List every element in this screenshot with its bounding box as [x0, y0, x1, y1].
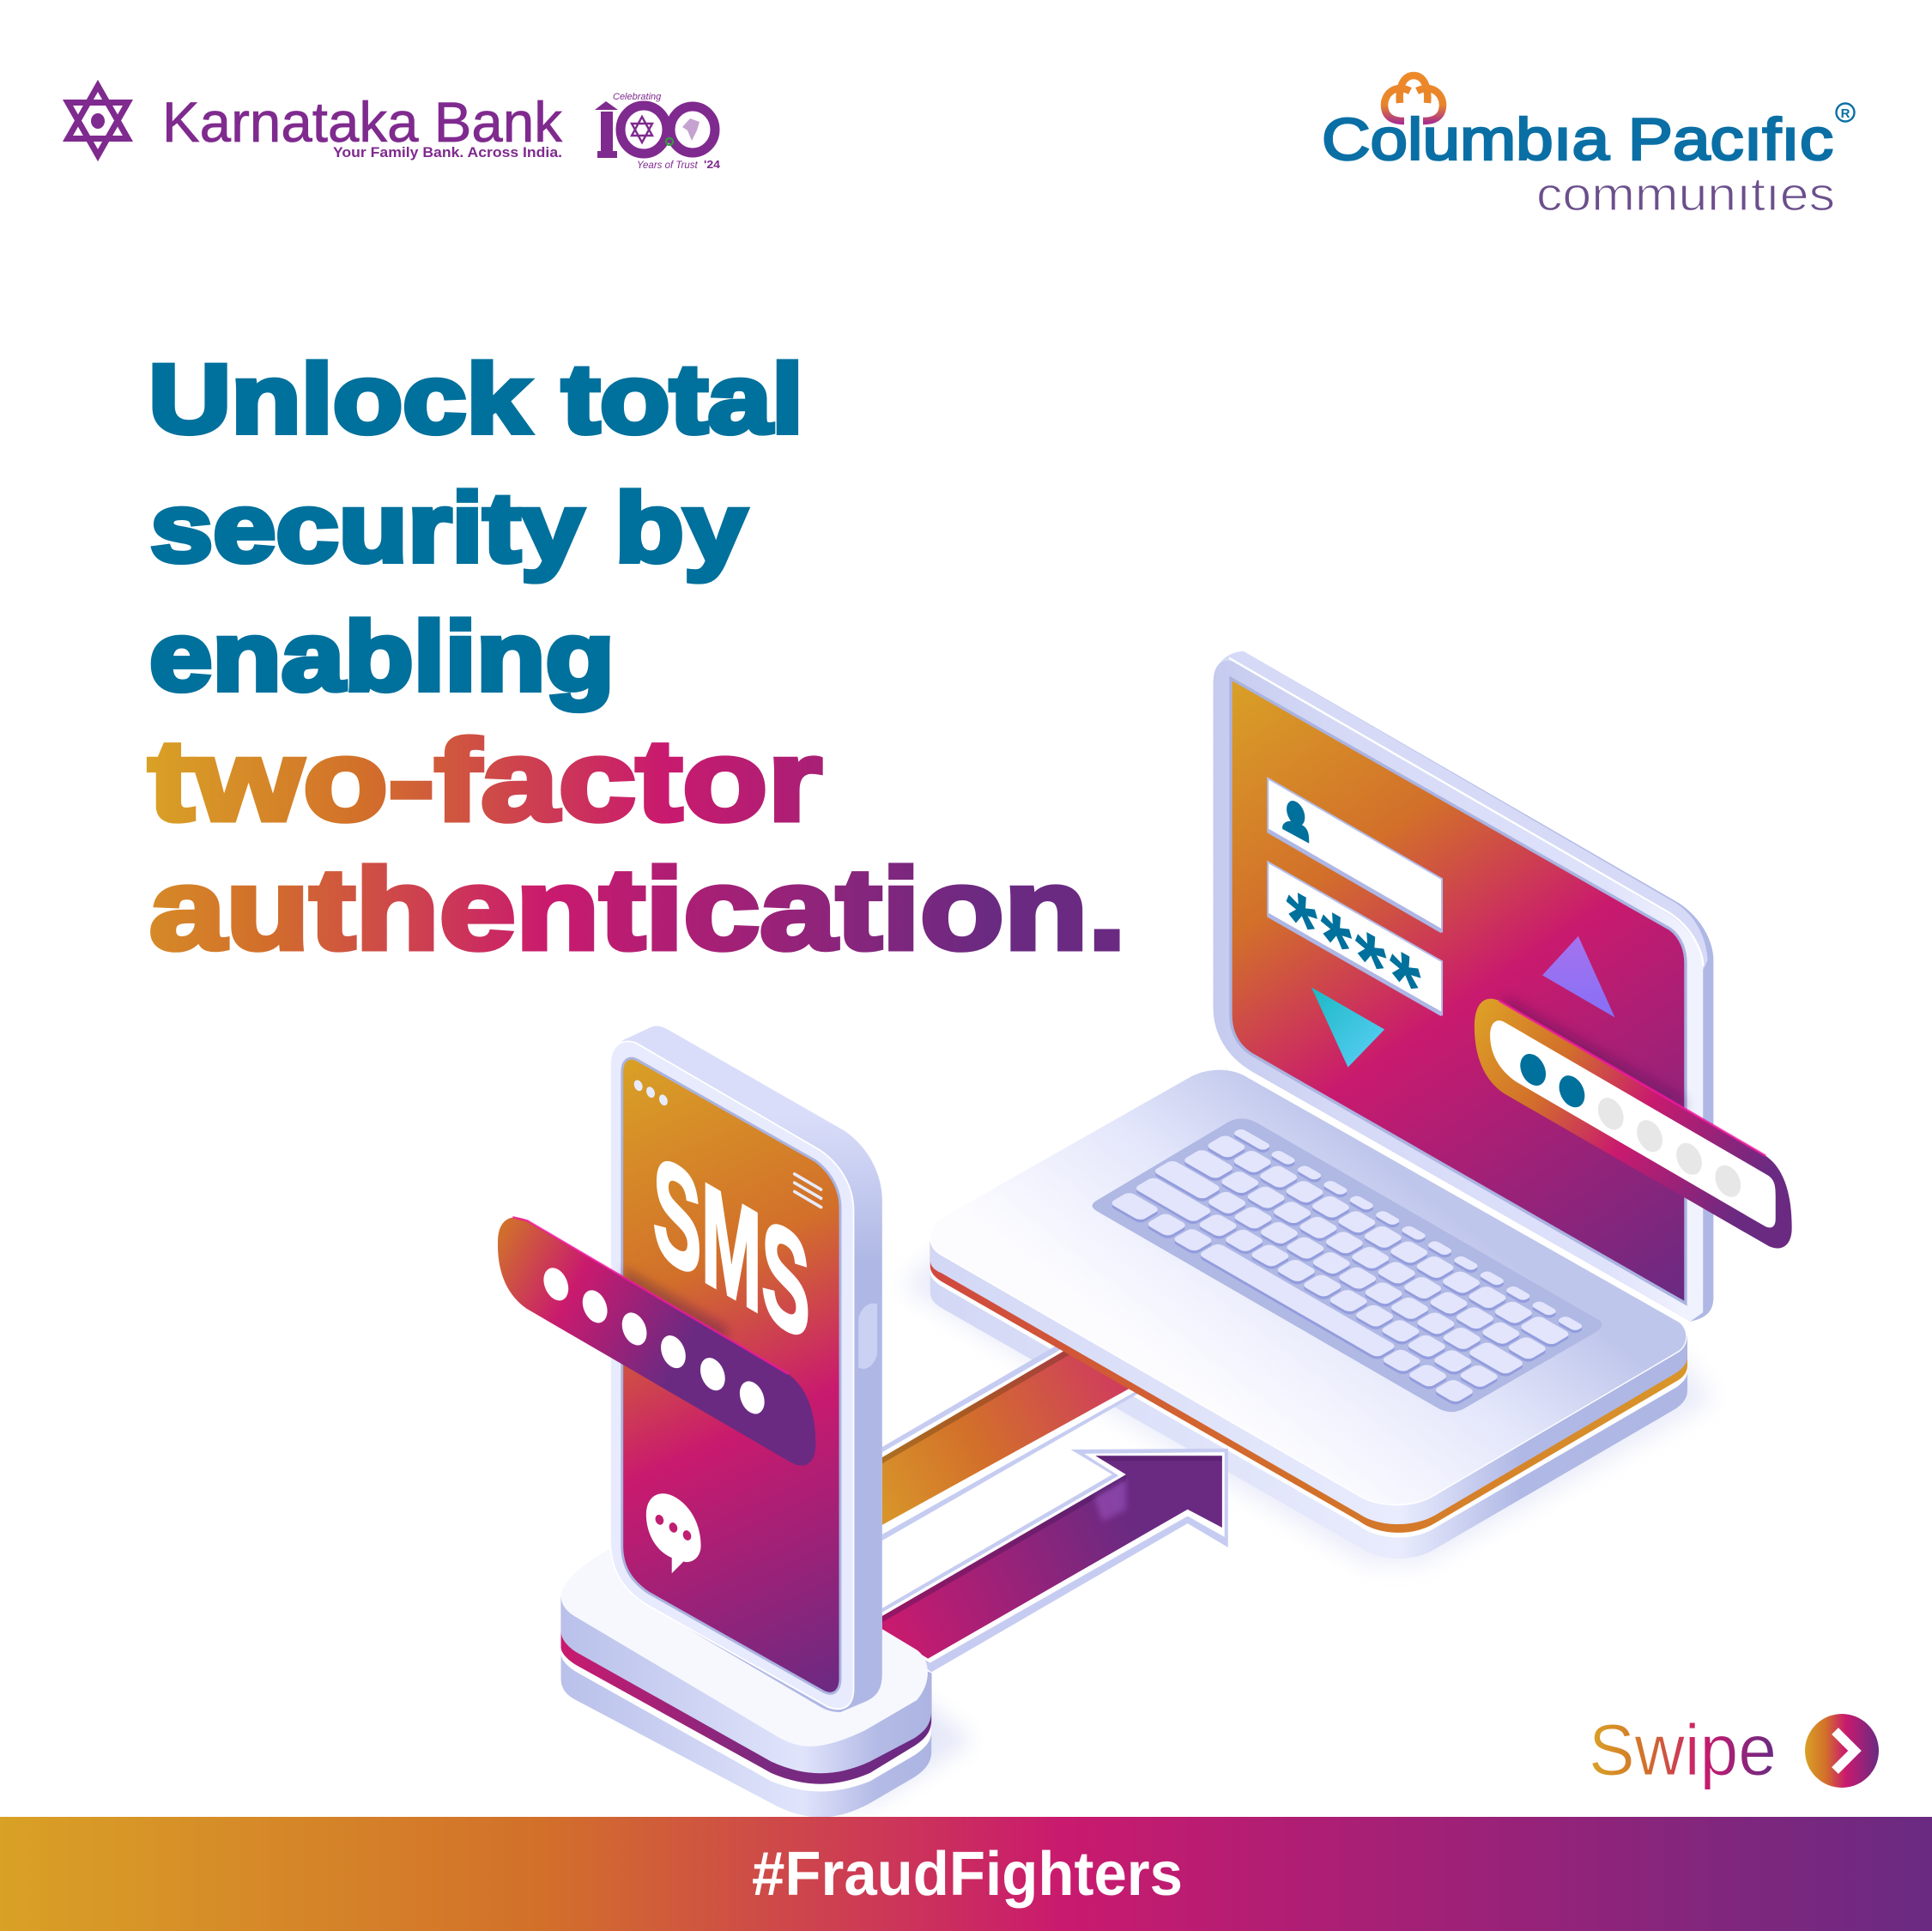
keyboard recess: [1093, 1118, 1602, 1412]
year label: '24: [704, 158, 721, 171]
line: security by: security by: [150, 474, 747, 583]
chat bubble icon: [646, 1493, 701, 1573]
phone front frame: [610, 1041, 854, 1709]
phone password pill: [498, 1217, 815, 1466]
orange strip: [930, 1068, 1687, 1533]
phone body: [610, 1026, 882, 1712]
icon: star emblem: [68, 86, 128, 155]
menu icon: [795, 1174, 821, 1208]
phone screen: [622, 1058, 840, 1693]
lid back edge: [1214, 651, 1713, 1322]
rings: [621, 106, 667, 154]
laptop lid: [1214, 651, 1713, 1322]
status dots: [633, 1079, 669, 1107]
line: two-factor: two-factor: [148, 717, 822, 844]
phone stand shadow: [826, 1699, 973, 1803]
years of trust label: Years of Trust: [637, 160, 699, 171]
wordmark: Columbıa Pacıfıc: [1322, 106, 1833, 173]
keyboard: [1093, 1118, 1602, 1412]
line: authentication.: authentication.: [149, 846, 1126, 973]
pill shadow: [1505, 996, 1686, 1111]
icon: user: [1282, 798, 1309, 844]
line: Unlock total: Unlock total: [148, 345, 803, 454]
line: enabling: enabling: [149, 602, 615, 711]
Columbia Pacific logo: [1322, 76, 1854, 221]
password field: [1268, 862, 1442, 1040]
stand top surface: [561, 1548, 928, 1746]
hashtag: #FraudFighters: [752, 1840, 1183, 1909]
username field: [1268, 778, 1442, 931]
green link: [666, 138, 673, 145]
white separator: [930, 1068, 1687, 1537]
small star: [632, 117, 652, 142]
Karnataka Bank logo: [68, 86, 563, 160]
lid front frame: [1214, 661, 1703, 1322]
white rim highlight: [1229, 658, 1703, 966]
violet triangle: [1542, 936, 1614, 1017]
laptop: [930, 651, 1792, 1533]
teal triangle: [1311, 987, 1384, 1068]
hashtag footer bar: [0, 1817, 1932, 1931]
laptop screen: [1231, 679, 1686, 1304]
base lower slab: [930, 1068, 1687, 1559]
base top surface: [930, 1069, 1687, 1504]
laptop password pill: [1475, 999, 1792, 1249]
map of India: [682, 118, 700, 141]
headline: [148, 345, 1126, 973]
swipe prompt: [1589, 1710, 1879, 1790]
phone: [498, 1026, 973, 1817]
laptop ground shadow: [901, 1238, 1713, 1562]
stand colour strip: [561, 1543, 931, 1784]
keyboard keys: [1101, 1123, 1589, 1407]
icon: cloud knot: [1384, 76, 1443, 121]
base upper slab: [930, 1068, 1687, 1524]
tagline: Your Family Bank. Across India.: [333, 144, 562, 160]
laptop underside layers: [901, 1068, 1713, 1562]
stand upper slab: [561, 1543, 931, 1773]
celebrating label: Celebrating: [613, 92, 662, 102]
communities label: communıtıes: [1536, 167, 1835, 221]
code digits: [539, 1263, 769, 1418]
SMS heading: SMS: [653, 1123, 810, 1372]
pillar numeral: [595, 101, 618, 158]
entered digits: [1515, 1050, 1746, 1202]
stand separator: [561, 1543, 931, 1791]
pill shadow: [623, 1268, 727, 1343]
swipe label: Swipe: [1589, 1710, 1777, 1790]
masked password: ****: [1286, 868, 1424, 1040]
lower arrow to laptop: [882, 1449, 1228, 1672]
centenary 100 logo: [595, 92, 721, 171]
registered mark: R: [1841, 106, 1850, 121]
registered mark: [1837, 103, 1854, 122]
side button: [858, 1304, 877, 1369]
icon: chevron button: [1805, 1714, 1879, 1788]
stand lower slab: [561, 1543, 931, 1817]
upper arrow leaving phone: [882, 1340, 1155, 1541]
bank name: Karnataka Bank: [162, 90, 563, 154]
